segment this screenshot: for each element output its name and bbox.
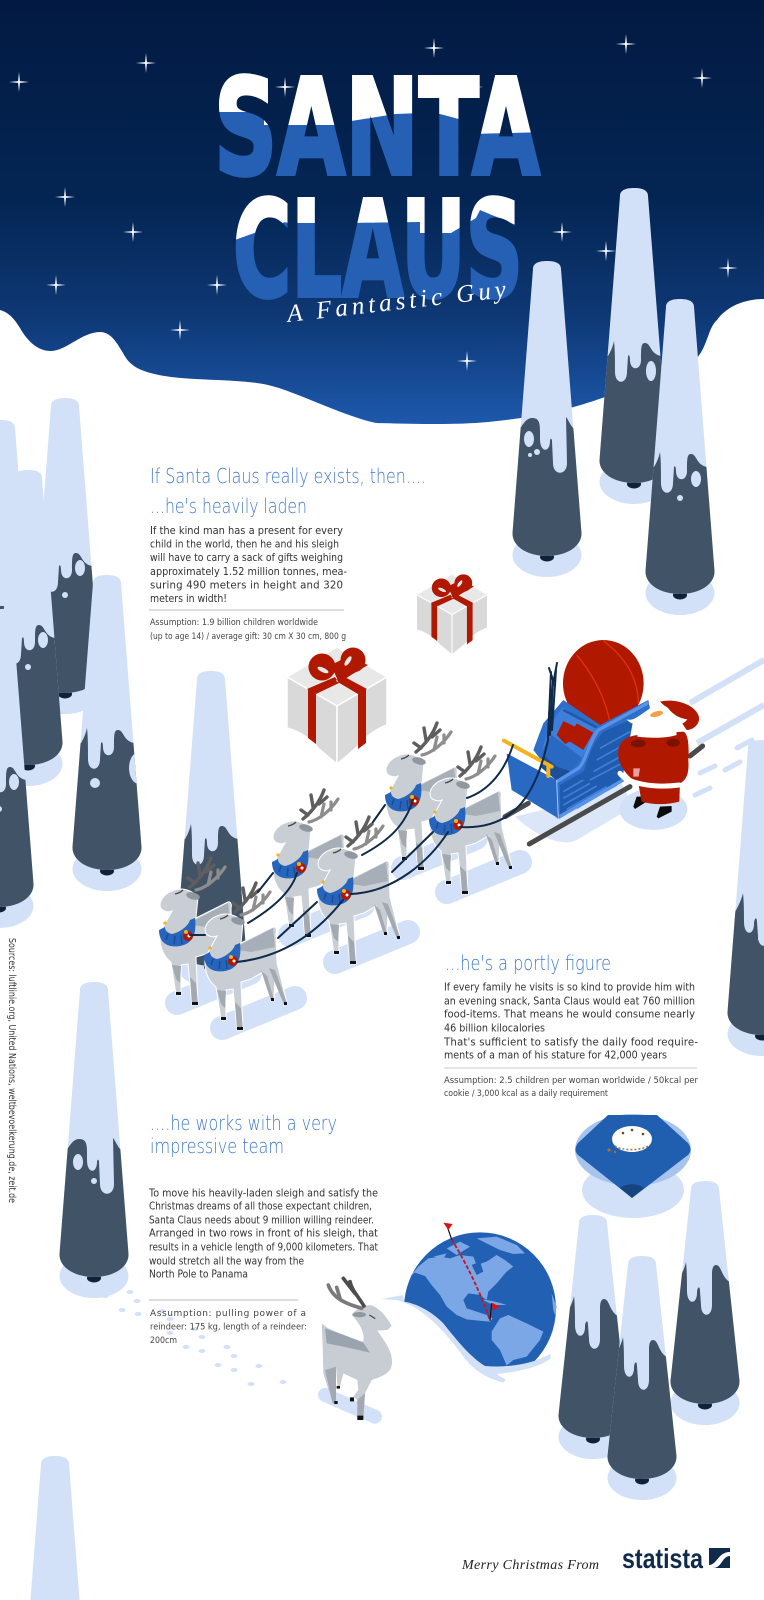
text block: heavily laden: If the kind man has a present for every xyxy=(150,526,343,537)
sleigh shadow xyxy=(515,780,633,842)
Santa xyxy=(618,701,699,818)
text block: portly figure: 46 billion kilocalories xyxy=(444,1024,545,1034)
assumption: heavily laden xyxy=(150,618,346,642)
assumption: impressive team: 200cm xyxy=(150,1336,177,1346)
tree group: left xyxy=(0,398,149,928)
reindeer 2 xyxy=(204,883,295,1030)
lone reindeer xyxy=(322,1278,392,1420)
text block: heavily laden: child in the world, then he and his sleigh xyxy=(150,540,339,550)
footer: Merry Christmas From: Merry Christmas From xyxy=(461,1558,599,1573)
assumption: heavily laden: (up to age 14) / average gift: 30 cm X 30 cm, 800 g xyxy=(150,632,346,642)
footprints xyxy=(102,1290,286,1386)
icon: large gift xyxy=(287,647,387,764)
text block: portly figure: ments of a man of his stature for 42,000 years xyxy=(444,1050,667,1062)
text block: heavily laden: approximately 1.52 million tonnes, mea- xyxy=(150,567,347,578)
text block: portly figure xyxy=(443,982,698,1062)
text block: impressive team: To move his heavily-laden sleigh and satisfy the xyxy=(148,1188,378,1200)
assumption: portly figure: Assumption: 2.5 children per woman worldwide / 50kcal per xyxy=(444,1076,698,1086)
reindeer 4 xyxy=(317,817,408,964)
heading: heavily laden: ...he's heavily laden xyxy=(150,494,307,518)
reindeer 5 xyxy=(385,723,476,870)
heading: portly figure: ...he's a portly figure xyxy=(445,951,611,975)
source note: Sources: luftlinie.org, United Nations, weltbevoelkerung.de, zeit.de xyxy=(6,938,17,1203)
text block: portly figure: an evening snack, Santa Claus would eat 760 million xyxy=(444,996,695,1008)
sleigh body xyxy=(507,700,650,818)
assumption: portly figure xyxy=(444,1076,698,1099)
logo: statista: statista xyxy=(622,1543,703,1574)
text block: portly figure: food-items. That means he would consume nearly xyxy=(444,1010,695,1020)
icon: cookie on napkin xyxy=(575,1114,691,1218)
sleigh with sack and Santa xyxy=(504,640,703,844)
assumption: impressive team: reindeer: 175 kg, length of a reindeer: xyxy=(150,1322,307,1332)
sack xyxy=(563,640,644,727)
title: SANTA CLAUS: CLAUS xyxy=(233,174,523,328)
text block: heavily laden: will have to carry a sack of gifts weighing xyxy=(150,553,343,564)
text block: impressive team: Arranged in two rows in front of his sleigh, that xyxy=(149,1228,378,1240)
title: SANTA CLAUS: SANTA xyxy=(214,52,540,206)
reins xyxy=(190,663,557,962)
night sky xyxy=(0,0,764,440)
reindeer 1 xyxy=(159,858,250,1005)
icon: small gift xyxy=(416,574,488,655)
divider xyxy=(149,609,344,611)
text block: impressive team xyxy=(148,1188,378,1280)
stars xyxy=(9,34,738,371)
yellow bar xyxy=(504,741,552,776)
heading: if Santa Claus really exists: If Santa Claus really exists, then.... xyxy=(150,464,426,488)
tree: bottom left xyxy=(30,1456,80,1600)
divider xyxy=(444,1067,697,1069)
assumption: impressive team: Assumption: pulling power of a xyxy=(150,1309,306,1319)
text block: impressive team: Christmas dreams of all those expectant children, xyxy=(149,1202,372,1212)
tree group: bottom right xyxy=(553,1181,745,1500)
heading: impressive team: impressive team xyxy=(150,1134,284,1158)
title: SANTA CLAUS xyxy=(219,73,542,300)
divider xyxy=(149,1299,298,1301)
reindeer team xyxy=(159,663,557,1030)
reindeer 6 xyxy=(429,747,520,894)
text block: heavily laden: meters in width! xyxy=(150,594,227,605)
text block: impressive team: North Pole to Panama xyxy=(149,1270,248,1280)
assumption: impressive team xyxy=(150,1309,307,1346)
heading: impressive team: ....he works with a very xyxy=(150,1111,337,1135)
subtitle: A Fantastic Guy xyxy=(284,276,508,328)
tree: right edge xyxy=(728,740,764,1056)
title: SANTA CLAUS: CLAUS xyxy=(233,174,523,328)
runners xyxy=(505,746,703,844)
text block: portly figure: If every family he visits is so kind to provide him with xyxy=(444,982,695,994)
text block: heavily laden: suring 490 meters in height and 320 xyxy=(150,580,343,592)
icon: globe with route North Pole to Panama xyxy=(382,1223,557,1384)
text block: impressive team: results in a vehicle length of 9,000 kilometers. That xyxy=(149,1242,378,1254)
title: SANTA CLAUS: SANTA xyxy=(214,52,540,206)
Santa shadow xyxy=(619,789,687,830)
assumption: portly figure: cookie / 3,000 kcal as a daily requirement xyxy=(444,1089,608,1099)
snow tracks xyxy=(690,660,764,795)
text block: portly figure: That's sufficient to satisfy the daily food require- xyxy=(443,1038,698,1048)
tree group: top right xyxy=(507,188,720,615)
reindeer 3 xyxy=(272,790,363,937)
text block: impressive team: would stretch all the way from the xyxy=(149,1256,304,1268)
tree: lower left xyxy=(60,982,128,1298)
text block: impressive team: Santa Claus needs about 9 million willing reindeer. xyxy=(149,1216,374,1226)
text block: heavily laden xyxy=(150,526,347,605)
heading: impressive team xyxy=(150,1111,337,1158)
tree: centre left xyxy=(180,671,246,982)
assumption: heavily laden: Assumption: 1.9 billion children worldwide xyxy=(150,618,318,628)
